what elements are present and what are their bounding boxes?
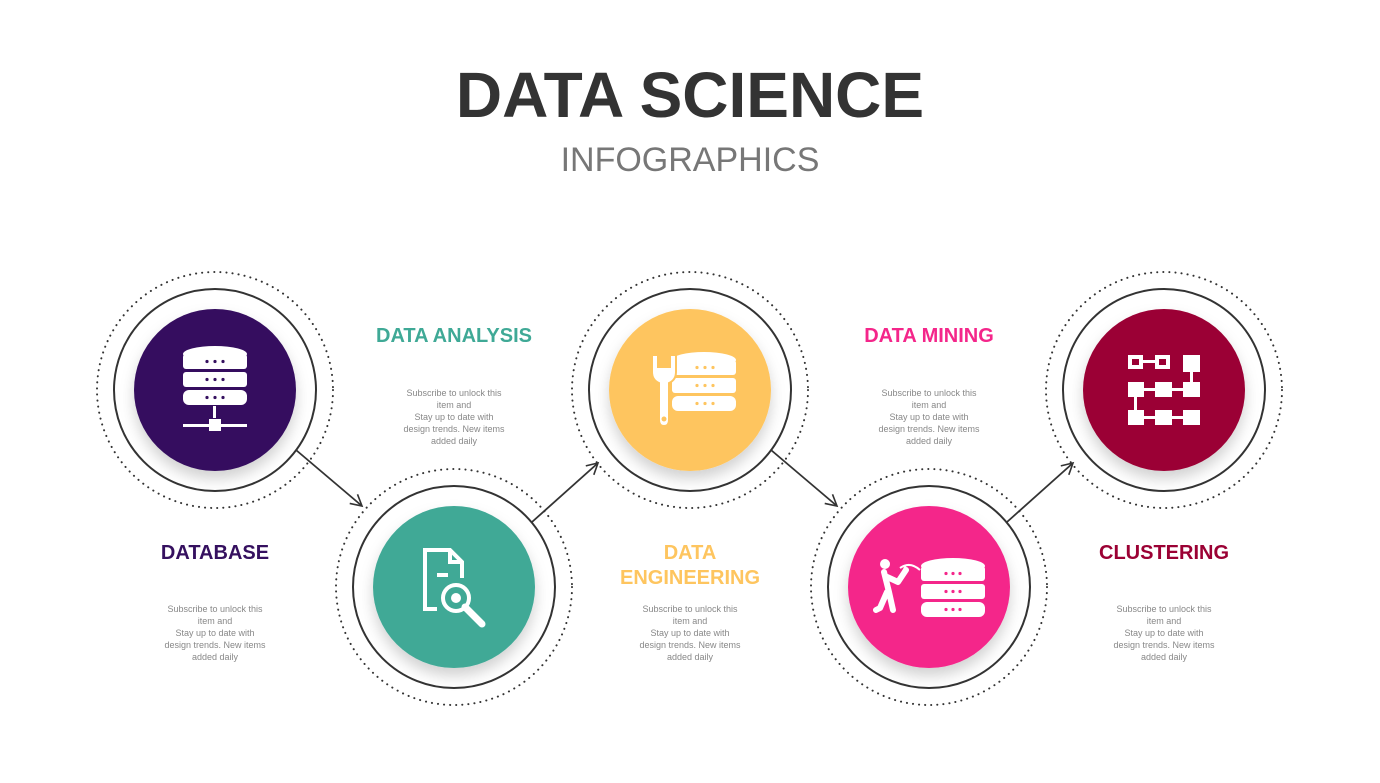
text block: data engineering: ENGINEERING [620, 567, 760, 589]
title: DATA SCIENCE [456, 59, 924, 131]
text block: data mining: Subscribe to unlock this [881, 388, 977, 398]
text block: database: item and [198, 616, 232, 626]
text block: database: Stay up to date with [175, 628, 255, 638]
arrow: mining to clustering [1007, 463, 1073, 522]
text block: database [161, 542, 269, 662]
icon: miner with database [876, 558, 985, 617]
text block: data analysis: Stay up to date with [414, 412, 494, 422]
subtitle: INFOGRAPHICS [561, 141, 819, 179]
text block: data analysis [376, 325, 532, 446]
arrow: database to analysis [296, 450, 362, 506]
text block: clustering: added daily [1141, 652, 1188, 662]
text block: data analysis: DATA ANALYSIS [376, 325, 532, 347]
text block: data mining: added daily [906, 436, 953, 446]
circle: data mining [811, 469, 1047, 705]
text block: data mining [864, 325, 994, 446]
text block: data analysis: item and [437, 400, 471, 410]
icon: wrench database [652, 352, 736, 426]
text block: database: Subscribe to unlock this [167, 604, 263, 614]
text block: clustering: design trends. New items [1113, 640, 1215, 650]
text block: data engineering: item and [673, 616, 707, 626]
text block: data engineering: DATA [664, 542, 716, 564]
text block: clustering: CLUSTERING [1099, 542, 1229, 564]
circle: data analysis [336, 469, 572, 705]
text block: data engineering: design trends. New items [639, 640, 741, 650]
text block: data mining: DATA MINING [864, 325, 994, 347]
text block: data mining: item and [912, 400, 946, 410]
arrow: engineering to mining [771, 450, 837, 506]
text block: data engineering [620, 542, 760, 662]
text block: database: added daily [192, 652, 239, 662]
circle: clustering [1046, 272, 1282, 508]
text block: data engineering: added daily [667, 652, 714, 662]
icon: document magnifier [425, 550, 482, 624]
text block: data analysis: Subscribe to unlock this [406, 388, 502, 398]
circle: database [97, 272, 333, 508]
text block: data engineering: Subscribe to unlock this [642, 604, 738, 614]
text block: data analysis: design trends. New items [403, 424, 505, 434]
text block: clustering: Stay up to date with [1124, 628, 1204, 638]
arrow: analysis to engineering [532, 463, 598, 522]
text block: data analysis: added daily [431, 436, 478, 446]
icon: database network [183, 346, 247, 431]
text block: database: DATABASE [161, 542, 269, 564]
text block: clustering: item and [1147, 616, 1181, 626]
icon: cluster nodes [1128, 355, 1200, 425]
text block: data mining: design trends. New items [878, 424, 980, 434]
text block: clustering [1099, 542, 1229, 662]
text block: data engineering: Stay up to date with [650, 628, 730, 638]
text block: clustering: Subscribe to unlock this [1116, 604, 1212, 614]
circle: data engineering [572, 272, 808, 508]
text block: database: design trends. New items [164, 640, 266, 650]
text block: data mining: Stay up to date with [889, 412, 969, 422]
